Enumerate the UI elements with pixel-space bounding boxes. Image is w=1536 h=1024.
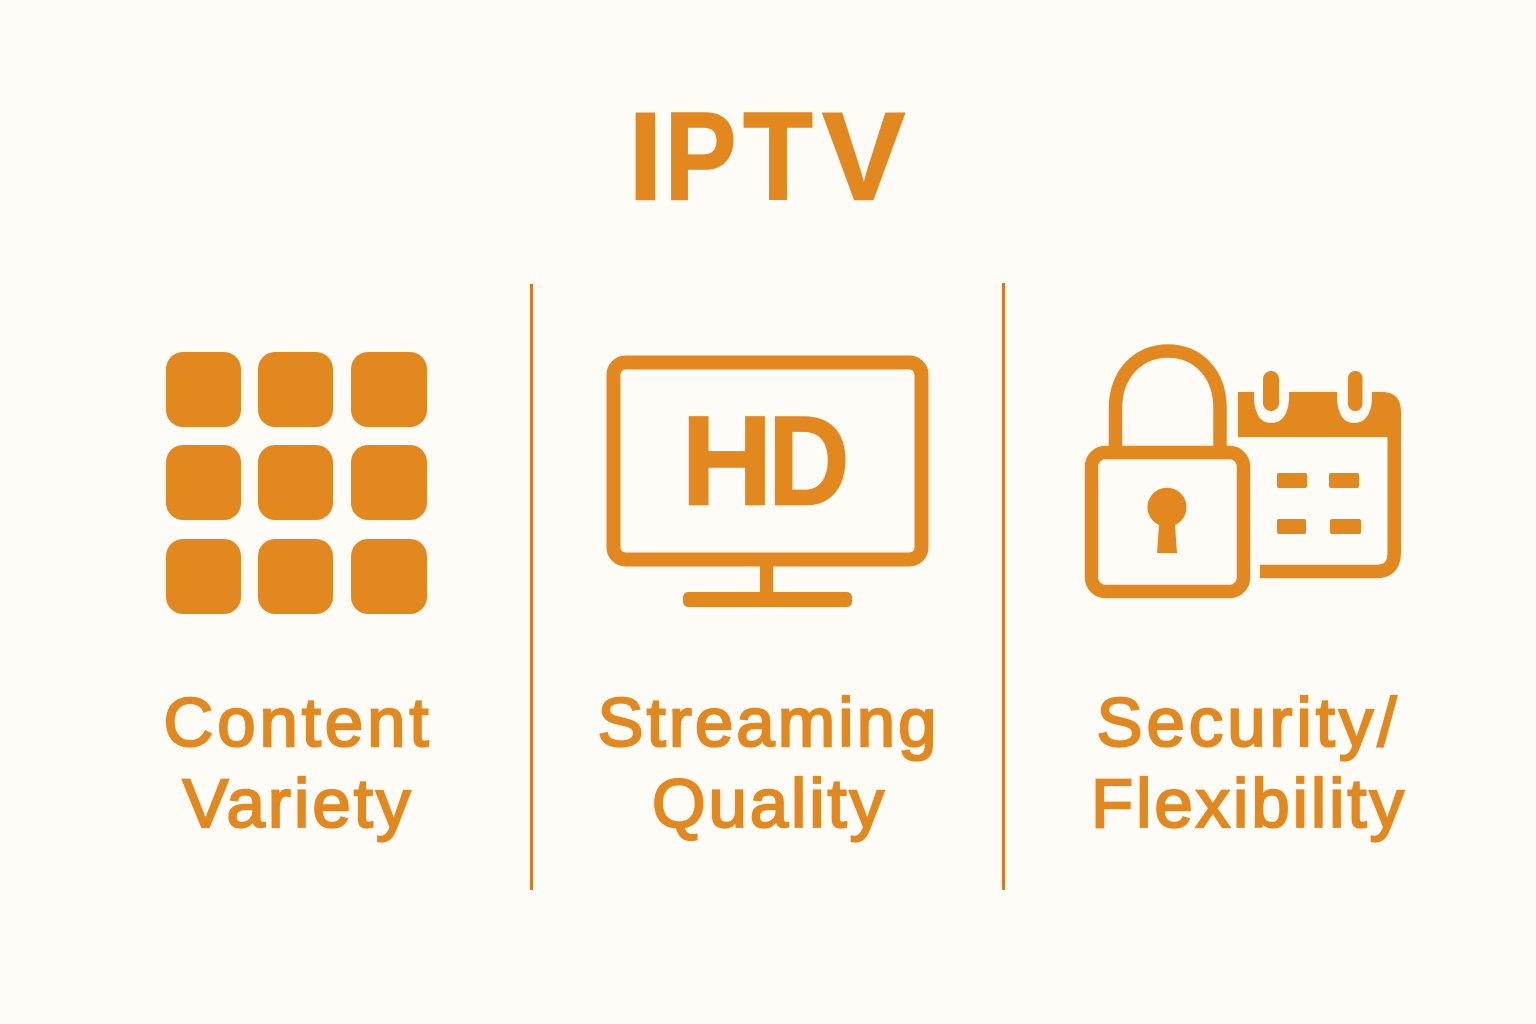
title: T (743, 88, 813, 226)
icon: HD monitor (614, 362, 922, 607)
divider right (1002, 283, 1005, 890)
title: V (822, 88, 905, 226)
label: security flexibility: Flexibility (1091, 765, 1404, 842)
title: I (628, 88, 663, 226)
icon: HD monitor: D (768, 390, 850, 532)
label: security flexibility (1091, 684, 1404, 842)
label: content variety: Variety (182, 765, 411, 842)
title: P (664, 88, 736, 226)
icon: HD monitor: H (681, 390, 773, 532)
icon: content grid (166, 352, 427, 614)
label: streaming quality: Streaming (598, 684, 936, 761)
label: content variety: Content (164, 684, 428, 761)
label: security flexibility: Security/ (1096, 684, 1397, 761)
label: streaming quality: Quality (652, 765, 884, 842)
divider left (530, 284, 533, 890)
icon: lock and calendar (1092, 351, 1401, 592)
label: streaming quality (598, 684, 936, 842)
icon: padlock (1092, 351, 1244, 592)
icon: calendar (1238, 371, 1401, 572)
label: content variety (164, 684, 428, 842)
